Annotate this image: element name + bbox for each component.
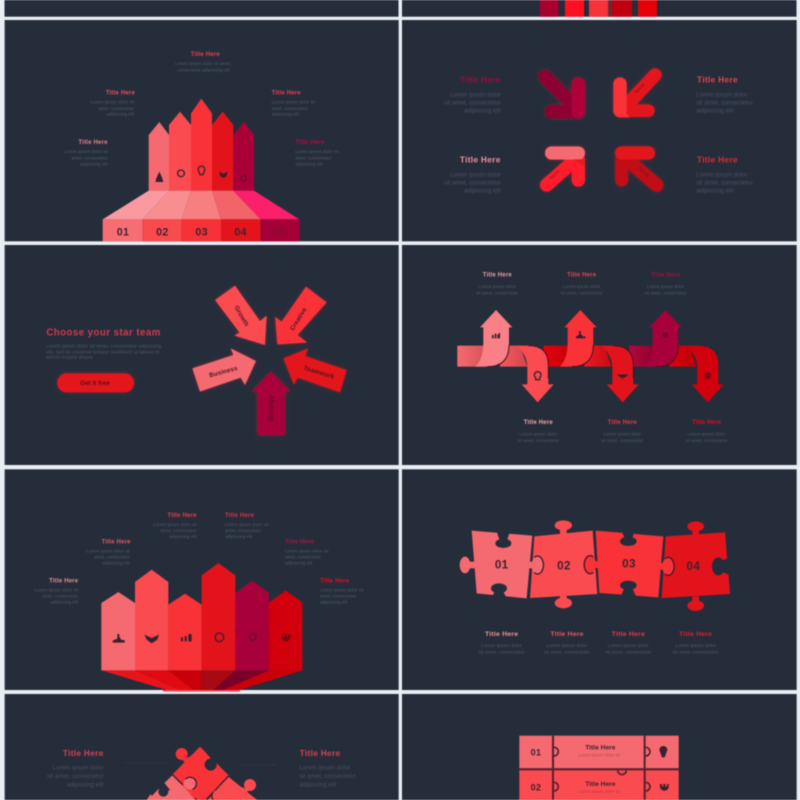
label 4: amet, consectetur bbox=[225, 528, 262, 533]
label 1: adipiscing elit bbox=[51, 599, 79, 604]
label: left: Title Here bbox=[63, 748, 104, 758]
label: top left: Title Here bbox=[460, 75, 501, 85]
label: right: adipiscing elit bbox=[299, 782, 337, 789]
label: bottom right: adipiscing elit bbox=[696, 188, 734, 195]
label 2 bbox=[87, 539, 131, 565]
label: bottom left: sit amet, consectetur bbox=[444, 179, 501, 186]
label 3 bbox=[605, 631, 652, 655]
label 1 bbox=[479, 631, 525, 655]
label: top right: Title Here bbox=[697, 75, 738, 85]
label: upper left: Lorem ipsum dolor sit bbox=[91, 100, 135, 105]
arrow: teamwork bbox=[283, 348, 347, 392]
label 5: adipiscing elit bbox=[285, 560, 313, 565]
funnel overflow sliver bbox=[163, 690, 240, 692]
label: top 1: sit amet, consectetur bbox=[476, 290, 519, 295]
piece numbers: 01 bbox=[495, 558, 509, 571]
label: top 3: Lorem ipsum dolor bbox=[647, 284, 685, 289]
label 2 bbox=[544, 631, 590, 655]
label: bottom 3: sit amet, consectetur bbox=[686, 438, 728, 443]
label 3: sit amet, consectetur bbox=[605, 649, 652, 655]
label: bottom 1 bbox=[517, 420, 560, 443]
label 4: Title Here bbox=[679, 631, 712, 638]
piece numbers: 04 bbox=[687, 560, 700, 573]
label: bottom left: adipiscing elit bbox=[464, 188, 501, 195]
button bbox=[57, 373, 134, 392]
label 1: Title Here bbox=[49, 578, 79, 584]
panel: ribbon arrows timeline bbox=[402, 245, 797, 465]
label: upper right: Title Here bbox=[272, 90, 301, 96]
columns bbox=[101, 563, 302, 670]
ribbon unit 2 bbox=[544, 310, 639, 402]
label: far right: Title Here bbox=[295, 140, 325, 146]
label 5: Lorem ipsum dolor sit bbox=[285, 548, 329, 553]
label: right bbox=[299, 748, 356, 789]
arrow: bottom left bbox=[547, 153, 585, 185]
label 3: Lorem ipsum dolor bbox=[608, 643, 649, 649]
label: left: sit amet, consectetur bbox=[47, 773, 104, 780]
row 1 bbox=[519, 736, 679, 768]
panel: choose your star team bbox=[5, 245, 399, 465]
label 1 bbox=[35, 578, 79, 604]
label 6: adipiscing elit bbox=[320, 599, 348, 604]
row 2 bbox=[519, 768, 679, 800]
label: top 3 bbox=[645, 272, 687, 295]
label: bottom right: Title Here bbox=[697, 155, 738, 165]
arrow: top right: Text 01 bbox=[633, 81, 646, 95]
numbered front: 04 bbox=[234, 227, 247, 239]
sloped base bbox=[103, 191, 299, 219]
label: right: Title Here bbox=[300, 748, 341, 758]
label: bottom 2: sit amet, consectetur bbox=[601, 438, 644, 443]
label: bottom 2 bbox=[601, 420, 644, 443]
text block: elit, sed do eiusmod tempor incididunt ut labore et bbox=[46, 349, 160, 355]
label 2: Lorem ipsum dolor sit bbox=[87, 548, 131, 553]
label: bottom left bbox=[444, 155, 501, 195]
row 1: Lorem ipsum dolor sit bbox=[579, 753, 621, 758]
arrow: bottom: Strategy bbox=[268, 395, 275, 421]
text block bbox=[46, 344, 162, 361]
text block: dolore magna aliqua. bbox=[46, 355, 94, 361]
panel: puzzle table bbox=[402, 694, 797, 800]
panel: top right slide fragment bbox=[402, 0, 796, 17]
row 1: 01 bbox=[531, 748, 541, 758]
label: far left: adipiscing elit bbox=[80, 161, 108, 166]
label: bottom left: Title Here bbox=[460, 155, 501, 165]
label: bottom 3 bbox=[686, 420, 728, 443]
puzzle piece 3 bbox=[584, 531, 674, 598]
arrow: teamwork: Teamwork bbox=[303, 365, 335, 381]
label: top right: sit amet, consectetur bbox=[696, 99, 753, 106]
arrow: bottom right bbox=[622, 153, 657, 185]
label: upper right: adipiscing elit bbox=[272, 112, 300, 117]
row 2: Title Here bbox=[585, 781, 616, 788]
label 1: Lorem ipsum dolor sit bbox=[35, 587, 79, 592]
label: bottom left: Lorem ipsum dolor bbox=[450, 171, 501, 178]
label 6 bbox=[320, 578, 364, 604]
arrows bbox=[149, 99, 254, 191]
label: upper right: Lorem ipsum dolor sit bbox=[272, 100, 316, 105]
label: upper left: Title Here bbox=[106, 90, 135, 96]
label: right: Lorem ipsum dolor bbox=[299, 764, 350, 771]
label: bottom right bbox=[696, 155, 753, 195]
label: top: Title Here bbox=[191, 52, 220, 58]
label: bottom 1: Title Here bbox=[524, 420, 553, 426]
label: top 1: Lorem ipsum dolor bbox=[479, 284, 517, 289]
label: right: sit amet, consectetur bbox=[299, 773, 356, 780]
arrow: business: Business bbox=[209, 365, 239, 379]
label: top left: adipiscing elit bbox=[464, 108, 501, 115]
arrow: growth: Growth bbox=[233, 305, 250, 328]
label: left: adipiscing elit bbox=[67, 782, 104, 789]
puzzle piece 4 bbox=[662, 521, 730, 611]
arrow: bottom right: Text 03 bbox=[637, 165, 651, 178]
ribbon unit 1 bbox=[457, 310, 554, 402]
label 4 bbox=[673, 631, 719, 655]
puzzle: top piece bbox=[157, 745, 229, 800]
label: top 2: Title Here bbox=[567, 272, 597, 278]
label: top 1: Title Here bbox=[483, 272, 512, 278]
label: top left: Lorem ipsum dolor bbox=[450, 91, 501, 98]
label: bottom 3: Title Here bbox=[692, 420, 722, 426]
label: left: Lorem ipsum dolor bbox=[53, 764, 104, 771]
label: far left bbox=[64, 140, 108, 166]
label: bottom 2: Title Here bbox=[608, 420, 637, 426]
heading: Choose your star team bbox=[46, 327, 161, 338]
label 3: amet, consectetur bbox=[161, 528, 197, 533]
numbered front bbox=[103, 219, 300, 241]
piece numbers: 03 bbox=[622, 557, 636, 570]
label 3: Title Here bbox=[167, 513, 197, 519]
label: bottom 3: Lorem ipsum dolor bbox=[688, 432, 726, 437]
label: top 2: sit amet, consectetur bbox=[561, 290, 603, 295]
funnel base bbox=[101, 670, 302, 690]
button: Get it free bbox=[80, 380, 110, 387]
label 3: Lorem ipsum dolor sit bbox=[153, 522, 197, 527]
row 1: Title Here bbox=[585, 745, 616, 752]
label: far left: Lorem ipsum dolor sit bbox=[64, 149, 108, 154]
numbered front: 01 bbox=[117, 227, 129, 239]
puzzle piece 1 bbox=[460, 531, 544, 600]
label: top: consectetur adipiscing elit bbox=[177, 67, 230, 72]
arrow: business bbox=[192, 348, 256, 392]
icons bbox=[113, 633, 290, 643]
puzzle: right piece bbox=[203, 777, 263, 800]
text block: Lorem ipsum dolor sit amet, consectetur adipiscing bbox=[46, 344, 162, 350]
label: top: Lorem ipsum dolor sit amet, bbox=[175, 61, 231, 66]
guide lines bbox=[125, 763, 275, 765]
label: bottom 1: Lorem ipsum dolor bbox=[520, 432, 558, 437]
label 2: adipiscing elit bbox=[103, 560, 131, 565]
label 5 bbox=[285, 539, 329, 565]
label 6: amet, consectetur bbox=[320, 593, 357, 598]
arrow: growth bbox=[215, 286, 267, 345]
label 1: Lorem ipsum dolor bbox=[481, 643, 523, 649]
label 5: Title Here bbox=[285, 539, 315, 545]
label: upper right bbox=[272, 90, 316, 117]
label: top right: adipiscing elit bbox=[696, 108, 734, 115]
row 2: Lorem ipsum dolor sit bbox=[579, 789, 621, 794]
label: top 3: sit amet, consectetur bbox=[645, 290, 687, 295]
label 2: Lorem ipsum dolor bbox=[546, 643, 588, 649]
label: top right: Lorem ipsum dolor bbox=[696, 91, 747, 98]
label: bottom 1: sit amet, consectetur bbox=[517, 438, 560, 443]
arrow: bottom bbox=[252, 372, 291, 435]
label: top bbox=[175, 52, 231, 72]
panel: diamond puzzle bbox=[5, 694, 399, 800]
numbered front: 02 bbox=[156, 227, 169, 239]
label 4: Title Here bbox=[225, 513, 255, 519]
label: far right: adipiscing elit bbox=[295, 161, 324, 166]
label 4: adipiscing elit bbox=[225, 534, 253, 539]
panel: top left slide fragment bbox=[4, 0, 398, 17]
label 4: Lorem ipsum dolor sit bbox=[225, 522, 269, 527]
label 1: sit amet, consectetur bbox=[479, 649, 525, 655]
label 3 bbox=[153, 513, 197, 539]
label: bottom 2: Lorem ipsum dolor bbox=[604, 432, 642, 437]
label: top 3: Title Here bbox=[651, 272, 681, 278]
label: upper left bbox=[91, 90, 135, 117]
panel: four puzzle pieces bbox=[402, 469, 797, 690]
label 6: Lorem ipsum dolor sit bbox=[320, 587, 364, 592]
label 5: amet, consectetur bbox=[285, 554, 322, 559]
label 4 bbox=[225, 513, 269, 539]
label: far right: amet, consectetur bbox=[295, 155, 332, 160]
numbered front: 03 bbox=[195, 227, 208, 239]
label: far left: Title Here bbox=[78, 140, 108, 146]
label: top 2: Lorem ipsum dolor bbox=[563, 284, 601, 289]
arrow: top left bbox=[545, 77, 578, 112]
piece numbers: 02 bbox=[557, 559, 571, 572]
label: upper left: amet, consectetur bbox=[98, 106, 135, 111]
puzzle: left piece bbox=[143, 775, 213, 800]
arrow: top right bbox=[613, 75, 655, 117]
label 4: Lorem ipsum dolor bbox=[675, 643, 717, 649]
arrow: creative: Creative bbox=[289, 306, 309, 332]
label 4: sit amet, consectetur bbox=[673, 649, 719, 655]
label: top 2 bbox=[561, 272, 603, 295]
numbered front: 05 bbox=[274, 227, 286, 239]
panel: five rising arrows with numbered base bbox=[5, 20, 399, 241]
label: bottom right: Lorem ipsum dolor bbox=[696, 171, 747, 178]
label: top left bbox=[444, 75, 501, 115]
ribbon unit 3 bbox=[629, 310, 724, 402]
label: left bbox=[47, 748, 104, 789]
label 2: Title Here bbox=[101, 539, 131, 545]
label 6: Title Here bbox=[320, 578, 350, 584]
label: upper right: amet, consectetur bbox=[272, 106, 308, 111]
arrow: bottom left: Text 02 bbox=[548, 168, 561, 181]
label 2: sit amet, consectetur bbox=[544, 649, 590, 655]
label 2: Title Here bbox=[550, 631, 584, 638]
piece numbers bbox=[495, 557, 700, 573]
panel: six house shaped columns bbox=[5, 469, 399, 690]
label 1: amet, consectetur bbox=[42, 593, 79, 598]
label 3: Title Here bbox=[612, 631, 645, 638]
label: top right bbox=[696, 75, 753, 115]
label 1: Title Here bbox=[485, 631, 518, 638]
label: far left: amet, consectetur bbox=[72, 155, 108, 160]
label 3: adipiscing elit bbox=[169, 534, 197, 539]
arrow: creative bbox=[275, 287, 327, 344]
label: top left: sit amet, consectetur bbox=[444, 99, 501, 106]
label: far right bbox=[295, 140, 340, 166]
panel: four converging arrows bbox=[402, 20, 797, 241]
label: far right: Lorem ipsum dolor sit bbox=[295, 149, 340, 154]
label 2: amet, consectetur bbox=[94, 554, 130, 559]
row 2: 02 bbox=[531, 783, 541, 793]
label: bottom right: sit amet, consectetur bbox=[696, 179, 753, 186]
puzzle piece 2 bbox=[530, 520, 597, 608]
icons bbox=[155, 166, 246, 182]
label: top 1 bbox=[476, 272, 519, 295]
label: upper left: adipiscing elit bbox=[107, 112, 135, 117]
